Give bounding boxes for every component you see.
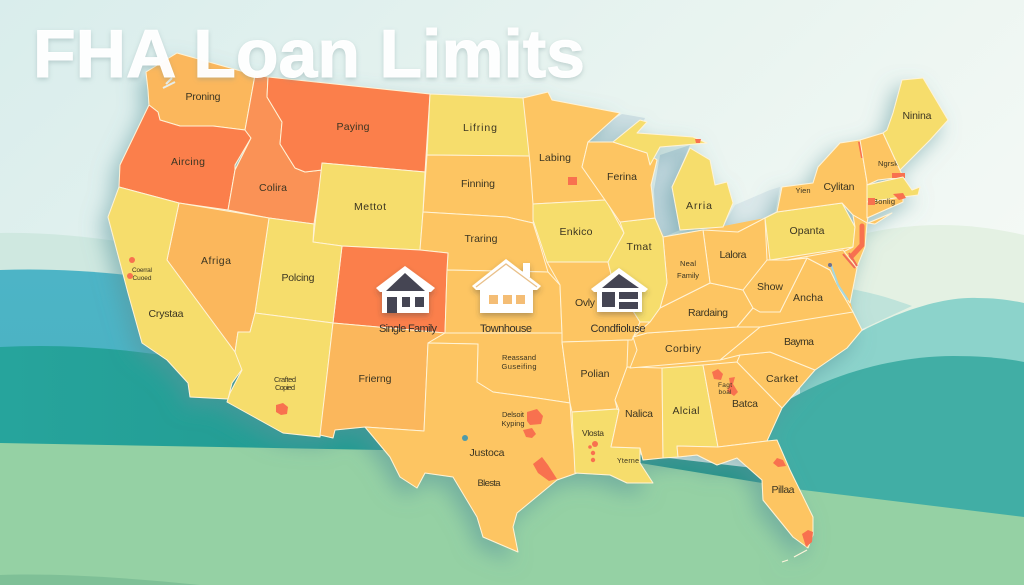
state: New York: Cylitan [824, 181, 855, 193]
state: Texas: Blesta [478, 478, 501, 489]
state: North Dakota [427, 94, 530, 156]
title: FHA Loan Limits [33, 16, 585, 92]
state: Iowa [533, 200, 624, 262]
state: West Virginia: Show [757, 281, 783, 293]
label: single family: Single Family [379, 323, 438, 335]
state: New Mexico: Frierng [358, 373, 392, 385]
state: Pennsylvania: Opanta [790, 225, 825, 237]
state: Arkansas [562, 340, 628, 412]
state: Oregon [119, 105, 251, 210]
state: Nevada: Afriga [201, 255, 231, 267]
state: Texas: Justoca [470, 447, 505, 459]
label: condo: Condfioluse [590, 323, 646, 335]
state: Montana [267, 77, 430, 172]
state: New York [777, 140, 892, 224]
state: Louisiana: Yterne [617, 458, 639, 465]
state: Indiana: Family [677, 271, 699, 280]
state: Illinois [608, 218, 667, 322]
state: Minnesota: Labing [539, 152, 571, 164]
land underlay [255, 156, 855, 473]
state: Indiana [660, 230, 710, 308]
state: Texas: Delsoit [502, 410, 525, 419]
state: Nebraska: Traring [464, 233, 498, 245]
state: Colorado [333, 246, 448, 333]
state: Missouri: Ovly [575, 297, 596, 309]
state: Indiana: Neal [680, 259, 696, 268]
state: Ohio: Lalora [720, 249, 747, 261]
state: Louisiana [572, 409, 653, 483]
state: Arizona [227, 313, 333, 437]
state: North Carolina [720, 310, 862, 370]
state: North Carolina: Bayma [784, 336, 814, 348]
state: Michigan: Arria [686, 200, 712, 212]
state: Georgia [703, 362, 782, 447]
state: Maine [883, 78, 948, 170]
state: South Carolina: Carket [766, 373, 798, 385]
state: West Virginia [743, 258, 807, 312]
state: Maryland and Delaware [787, 250, 857, 303]
state: Texas [365, 343, 577, 552]
state: Kentucky [633, 283, 753, 337]
state: California: Coerral [132, 267, 153, 274]
state: South Dakota: Finning [461, 178, 495, 190]
state: Maine: Ninina [902, 110, 932, 122]
state: Arizona: Copied [275, 383, 295, 392]
state: Wyoming [313, 163, 425, 250]
label: townhouse: Townhouse [480, 323, 532, 335]
state: Idaho: Colira [259, 182, 287, 194]
state: Virginia [737, 258, 853, 327]
state: Illinois: Tmat [626, 241, 652, 253]
state: Oklahoma: Reassand [502, 353, 536, 362]
state: Kansas [445, 270, 562, 333]
state: Wisconsin [582, 142, 657, 222]
state: Minnesota [523, 92, 620, 204]
state: Kentucky: Rardaing [688, 307, 728, 319]
state: Texas: Kyping [502, 419, 524, 428]
map of the United States [108, 53, 948, 562]
state: Ohio [703, 218, 767, 290]
state: Michigan [613, 120, 733, 230]
state: Montana: Paying [336, 121, 370, 133]
state: New Jersey [843, 215, 867, 267]
state: Nevada [167, 203, 269, 352]
state: Oklahoma: Guseifing [502, 362, 536, 371]
state: Virginia: Ancha [793, 292, 823, 304]
state: Oklahoma [428, 333, 570, 403]
state: California: Crystaa [148, 308, 184, 320]
state: Utah [255, 218, 342, 323]
state: Mississippi [611, 367, 663, 460]
state: Utah: Polcing [282, 272, 315, 284]
state: Georgia: Batca [732, 398, 758, 410]
state: Washington [146, 53, 255, 130]
state: Missouri [547, 262, 640, 342]
state: Alabama [662, 365, 718, 458]
state: Pennsylvania [765, 203, 855, 260]
state: Arkansas: Polian [580, 368, 610, 380]
state: New Mexico [320, 323, 445, 438]
state: New York: Yien [796, 186, 810, 195]
house icon: single family [376, 266, 435, 313]
house icon: townhouse [472, 259, 541, 313]
house icon: condo [591, 268, 648, 312]
state: North Dakota: Lifring [463, 122, 497, 134]
state: Georgia: Fagt [718, 382, 732, 389]
state: Massachusetts and Connecticut: Bonlig [873, 197, 895, 206]
state: Washington: Proning [186, 91, 221, 103]
state: Vermont and New Hampshire [860, 133, 905, 185]
state: Tennessee [630, 327, 760, 368]
state: Tennessee: Corbiry [665, 343, 702, 355]
state: Florida [677, 440, 813, 562]
state: Vermont and New Hampshire: Ngrsk [878, 159, 898, 168]
state: Mississippi: Nalica [625, 408, 653, 420]
state: Arizona: Crafted [274, 375, 296, 384]
state: Alabama: Alcial [672, 405, 700, 417]
state: South Dakota [423, 155, 535, 223]
lakes [588, 114, 780, 237]
state: Wisconsin: Ferina [607, 171, 637, 183]
state: Georgia: boal [718, 389, 732, 396]
state: South Carolina [737, 352, 815, 408]
state: California [108, 187, 243, 399]
state: Massachusetts and Connecticut [867, 177, 920, 218]
state: Idaho [228, 75, 322, 224]
state: Oregon: Aircing [171, 156, 205, 168]
state: Iowa: Enkico [560, 226, 593, 238]
state: California: Cuoed [132, 275, 152, 282]
state: Louisiana: Vlosta [582, 428, 604, 438]
state: Nebraska [420, 212, 548, 272]
state: Florida: Pillaa [772, 484, 795, 496]
state: Wyoming: Mettot [354, 201, 386, 213]
